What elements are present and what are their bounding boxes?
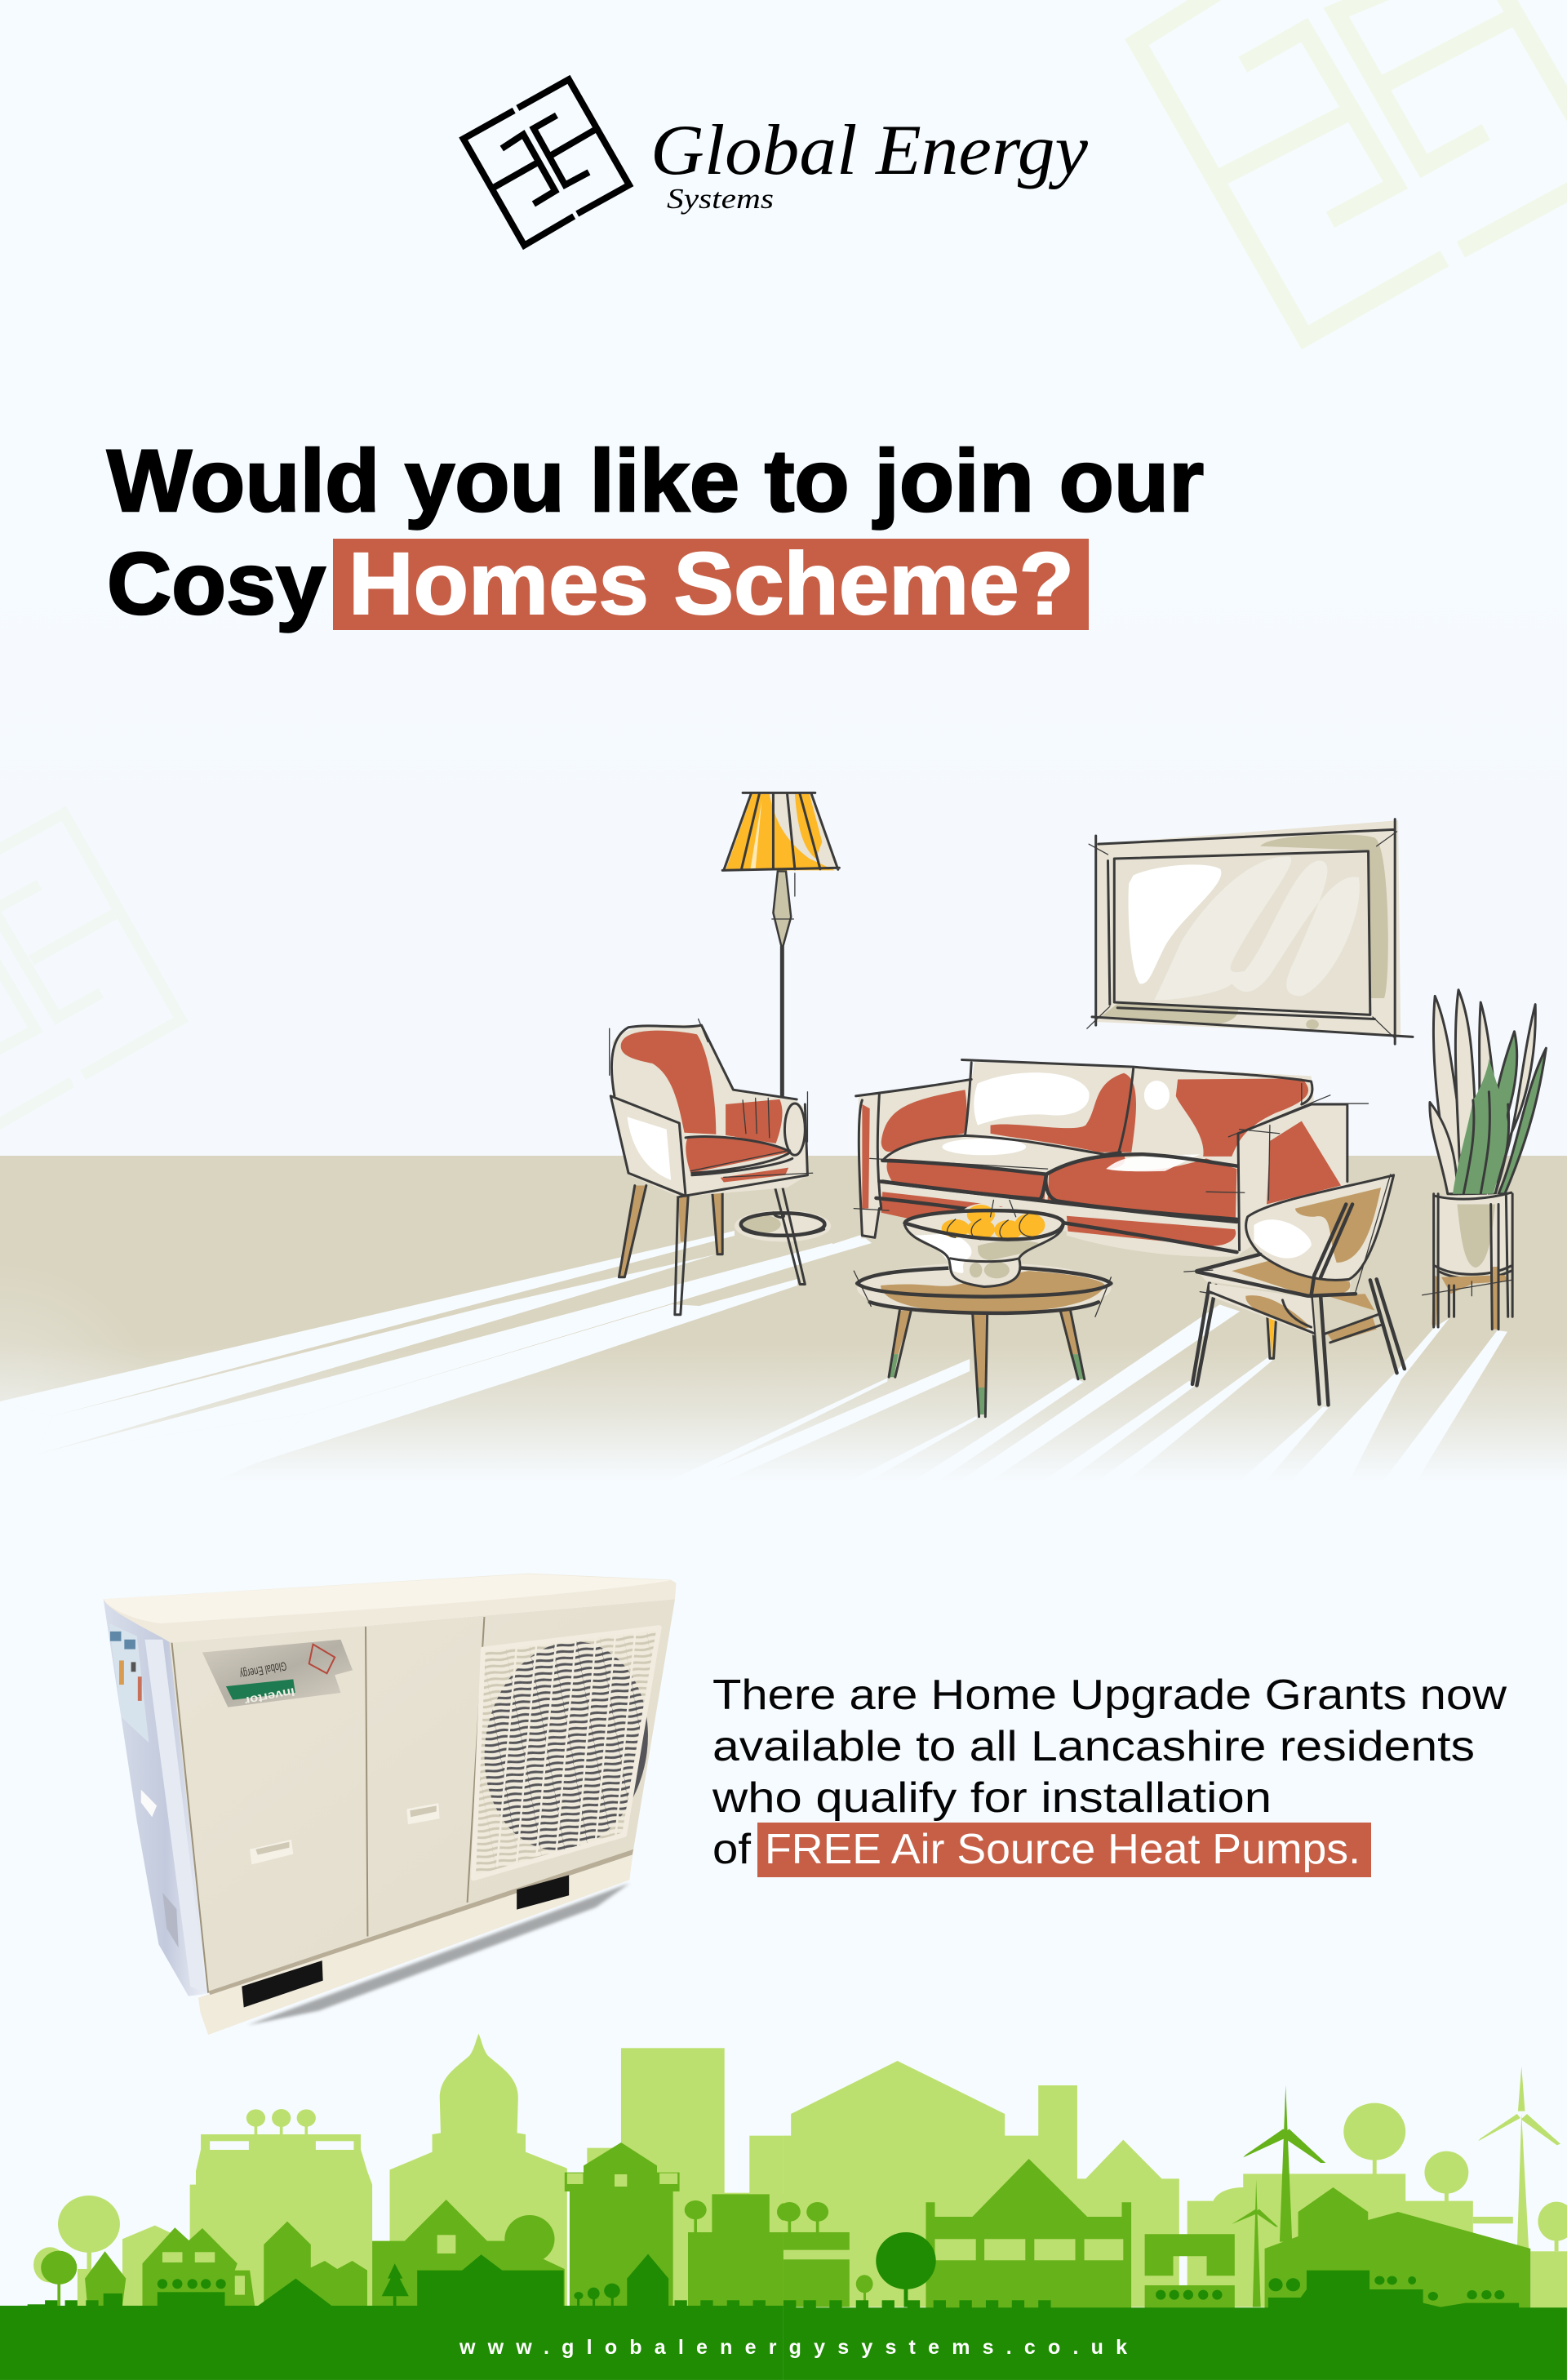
pump badge text <box>238 1658 295 1708</box>
plant pot <box>1435 1194 1512 1273</box>
highlight box <box>757 1823 1371 1877</box>
heading line one: Would you like to join our <box>107 431 1204 530</box>
floor <box>0 1156 1567 1482</box>
plant stand <box>1432 1275 1438 1325</box>
text block: grants information <box>712 1672 1507 1877</box>
armchair left <box>610 1019 813 1315</box>
footer website address: www.globalenergysystems.co.uk <box>459 2336 1127 2359</box>
mirror glass <box>1112 851 1370 1015</box>
floor lamp <box>722 793 839 1241</box>
pump ground shadow <box>248 1883 629 2025</box>
armchair body <box>613 1025 807 1197</box>
watermark: logo top right <box>1137 0 1567 337</box>
mirror lines <box>1092 819 1413 1044</box>
floor with light rays <box>0 1156 1567 1494</box>
heading highlighted text: Homes Scheme? <box>348 534 1074 633</box>
coffee table <box>854 1263 1111 1417</box>
door handles <box>250 1840 293 1864</box>
wall mirror <box>1087 819 1413 1044</box>
sofa lines <box>882 1161 1046 1199</box>
rays left <box>0 1231 872 1494</box>
sofa right arm <box>1267 1121 1341 1205</box>
left dark layer <box>0 2254 784 2380</box>
side stickers <box>109 1623 149 1743</box>
illustration: living room furniture <box>610 793 1546 1417</box>
armchair red upholstery <box>621 1031 716 1134</box>
heading highlight box <box>333 539 1089 630</box>
paragraph line two: available to all Lancashire residents <box>712 1723 1475 1770</box>
potted snake plant <box>1423 990 1546 1330</box>
sofa lower red panels <box>881 1192 1003 1219</box>
sofa left arm <box>862 1104 870 1209</box>
sofa body <box>859 1062 1347 1254</box>
right light layer <box>784 2061 1567 2308</box>
logo wordmark: Global Energy <box>650 111 1089 190</box>
photo: heat pump unit <box>104 1574 677 2035</box>
pump plinth <box>198 1849 633 2035</box>
palace windows <box>210 2141 353 2150</box>
sofa <box>854 1059 1369 1257</box>
pump side panel <box>104 1599 208 1996</box>
table legs <box>892 1311 911 1354</box>
skyline left half <box>0 2034 797 2380</box>
lamp pole <box>780 946 784 1097</box>
plant leaf blades <box>1433 996 1464 1194</box>
fan grille <box>472 1627 660 1878</box>
table top <box>857 1263 1111 1314</box>
left light layer <box>33 2034 784 2307</box>
highlighted phrase: FREE Air Source Heat Pumps. <box>765 1826 1361 1873</box>
sofa seat cushions <box>942 1139 1026 1155</box>
sofa back cushions <box>974 1072 1090 1126</box>
skyline: green town silhouette <box>0 2034 1567 2380</box>
paragraph line three: who qualify for installation <box>712 1774 1272 1822</box>
badge model text: Invertor <box>243 1685 295 1708</box>
left mid layer <box>41 2142 797 2306</box>
skyline right half <box>779 2061 1567 2380</box>
badge brand text: Global Energy <box>238 1658 287 1681</box>
watermark: logo left of room <box>0 814 181 1126</box>
wall tint behind room <box>0 571 1567 1156</box>
armchair lines <box>611 1025 797 1099</box>
icon: logo mark <box>464 79 629 246</box>
pump top lid <box>104 1574 677 1643</box>
chair frame tan parts <box>1327 1317 1377 1343</box>
title <box>107 431 1204 633</box>
right mid layer <box>779 2085 1530 2308</box>
right dark layer <box>784 2232 1567 2380</box>
chair legs <box>1268 1317 1275 1358</box>
armchair legs <box>619 1186 646 1277</box>
logo subtitle: Systems <box>667 183 774 215</box>
bowl body <box>905 1210 1063 1286</box>
logo: Global Energy Systems <box>464 79 1089 246</box>
fruit <box>960 1203 1008 1230</box>
paragraph line one: There are Home Upgrade Grants now <box>712 1672 1507 1719</box>
mirror frame <box>1095 820 1401 1036</box>
mirror highlight <box>1129 864 1221 984</box>
factory windows <box>934 2239 1123 2260</box>
house windows <box>162 2174 677 2295</box>
logo plate <box>202 1640 353 1707</box>
rays right <box>659 1304 1507 1485</box>
floor left fade <box>0 1261 163 1481</box>
chair lines <box>1246 1175 1394 1280</box>
door seams <box>172 1617 484 1993</box>
heading line two: Cosy <box>107 534 326 633</box>
pump front panel <box>170 1599 675 1993</box>
chair back <box>1246 1175 1394 1280</box>
plinth vents <box>242 1960 323 2007</box>
lamp base <box>735 1210 831 1241</box>
fruit bowl <box>905 1200 1063 1287</box>
lamp shade <box>724 793 837 870</box>
bowl lines <box>905 1210 1063 1240</box>
paragraph line four: of <box>712 1826 752 1873</box>
dining chair right <box>1184 1174 1405 1405</box>
armchair arm roll <box>784 1103 805 1155</box>
